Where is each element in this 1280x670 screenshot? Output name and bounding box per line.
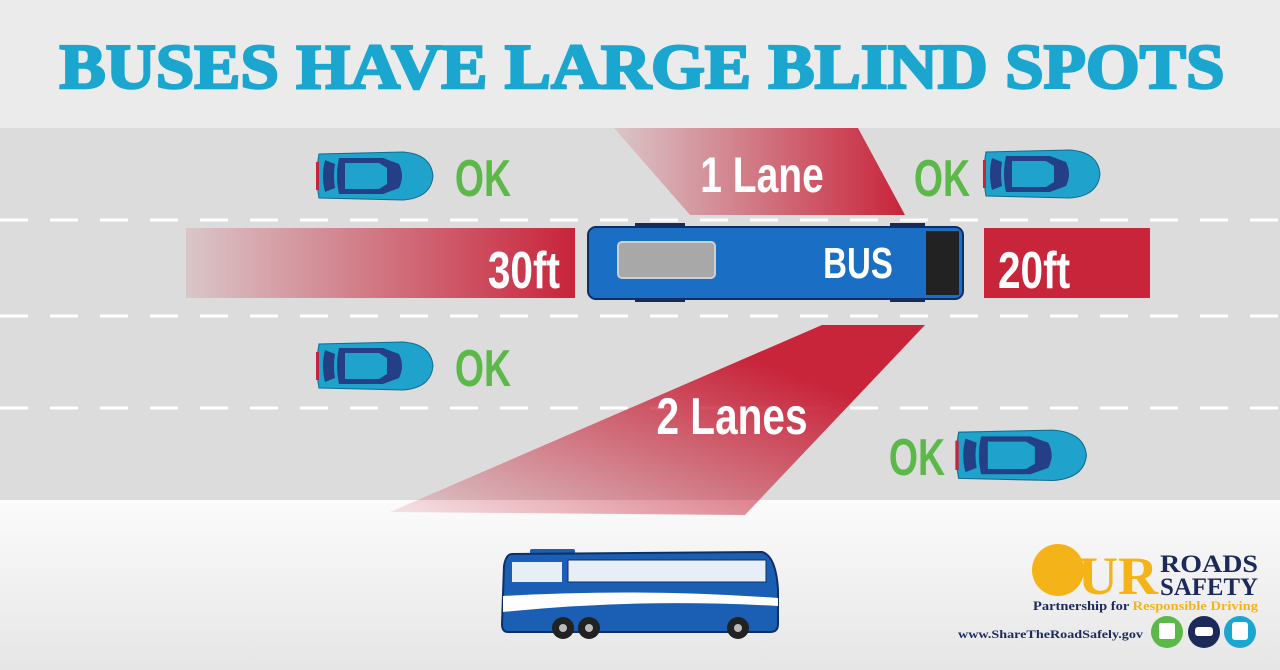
car bottom right + OK: OK — [889, 428, 945, 486]
car top right + OK — [914, 149, 1100, 207]
car top left + OK: OK — [455, 149, 511, 207]
car bottom right + OK — [889, 428, 1086, 486]
blind spot: 20ft front — [984, 228, 1150, 299]
blind spot: 30ft rear: 30ft — [488, 241, 560, 299]
logo: Our Roads Safety — [1032, 544, 1259, 613]
bus top view — [588, 223, 963, 302]
blind spot: 2 lanes — [390, 325, 925, 515]
bus top view: BUS — [823, 240, 893, 288]
logo: Our Roads Safety: SAFETY — [1160, 574, 1258, 601]
car top left + OK — [316, 149, 511, 207]
blind spot: 2 lanes: 2 Lanes — [656, 387, 808, 445]
icons: truck car bus — [1151, 616, 1256, 648]
title: BUSES HAVE LARGE BLIND SPOTS — [60, 31, 1224, 102]
logo: Our Roads Safety: Partnership for Responsible Driving — [1033, 598, 1259, 613]
blind spot: 1 lane: 1 Lane — [700, 146, 824, 203]
logo: Our Roads Safety: ROADS — [1160, 551, 1258, 578]
car top right + OK: OK — [914, 149, 970, 207]
road — [0, 128, 1280, 500]
blind spot: 20ft front: 20ft — [998, 241, 1070, 299]
website url: www.ShareTheRoadSafely.gov — [958, 627, 1143, 641]
coach bus side view — [502, 549, 778, 639]
car middle left + OK — [316, 339, 511, 397]
blind spot: 30ft rear — [186, 228, 575, 299]
logo: Our Roads Safety: UR — [1078, 546, 1159, 606]
car middle left + OK: OK — [455, 339, 511, 397]
blind spot: 1 lane — [614, 128, 905, 215]
